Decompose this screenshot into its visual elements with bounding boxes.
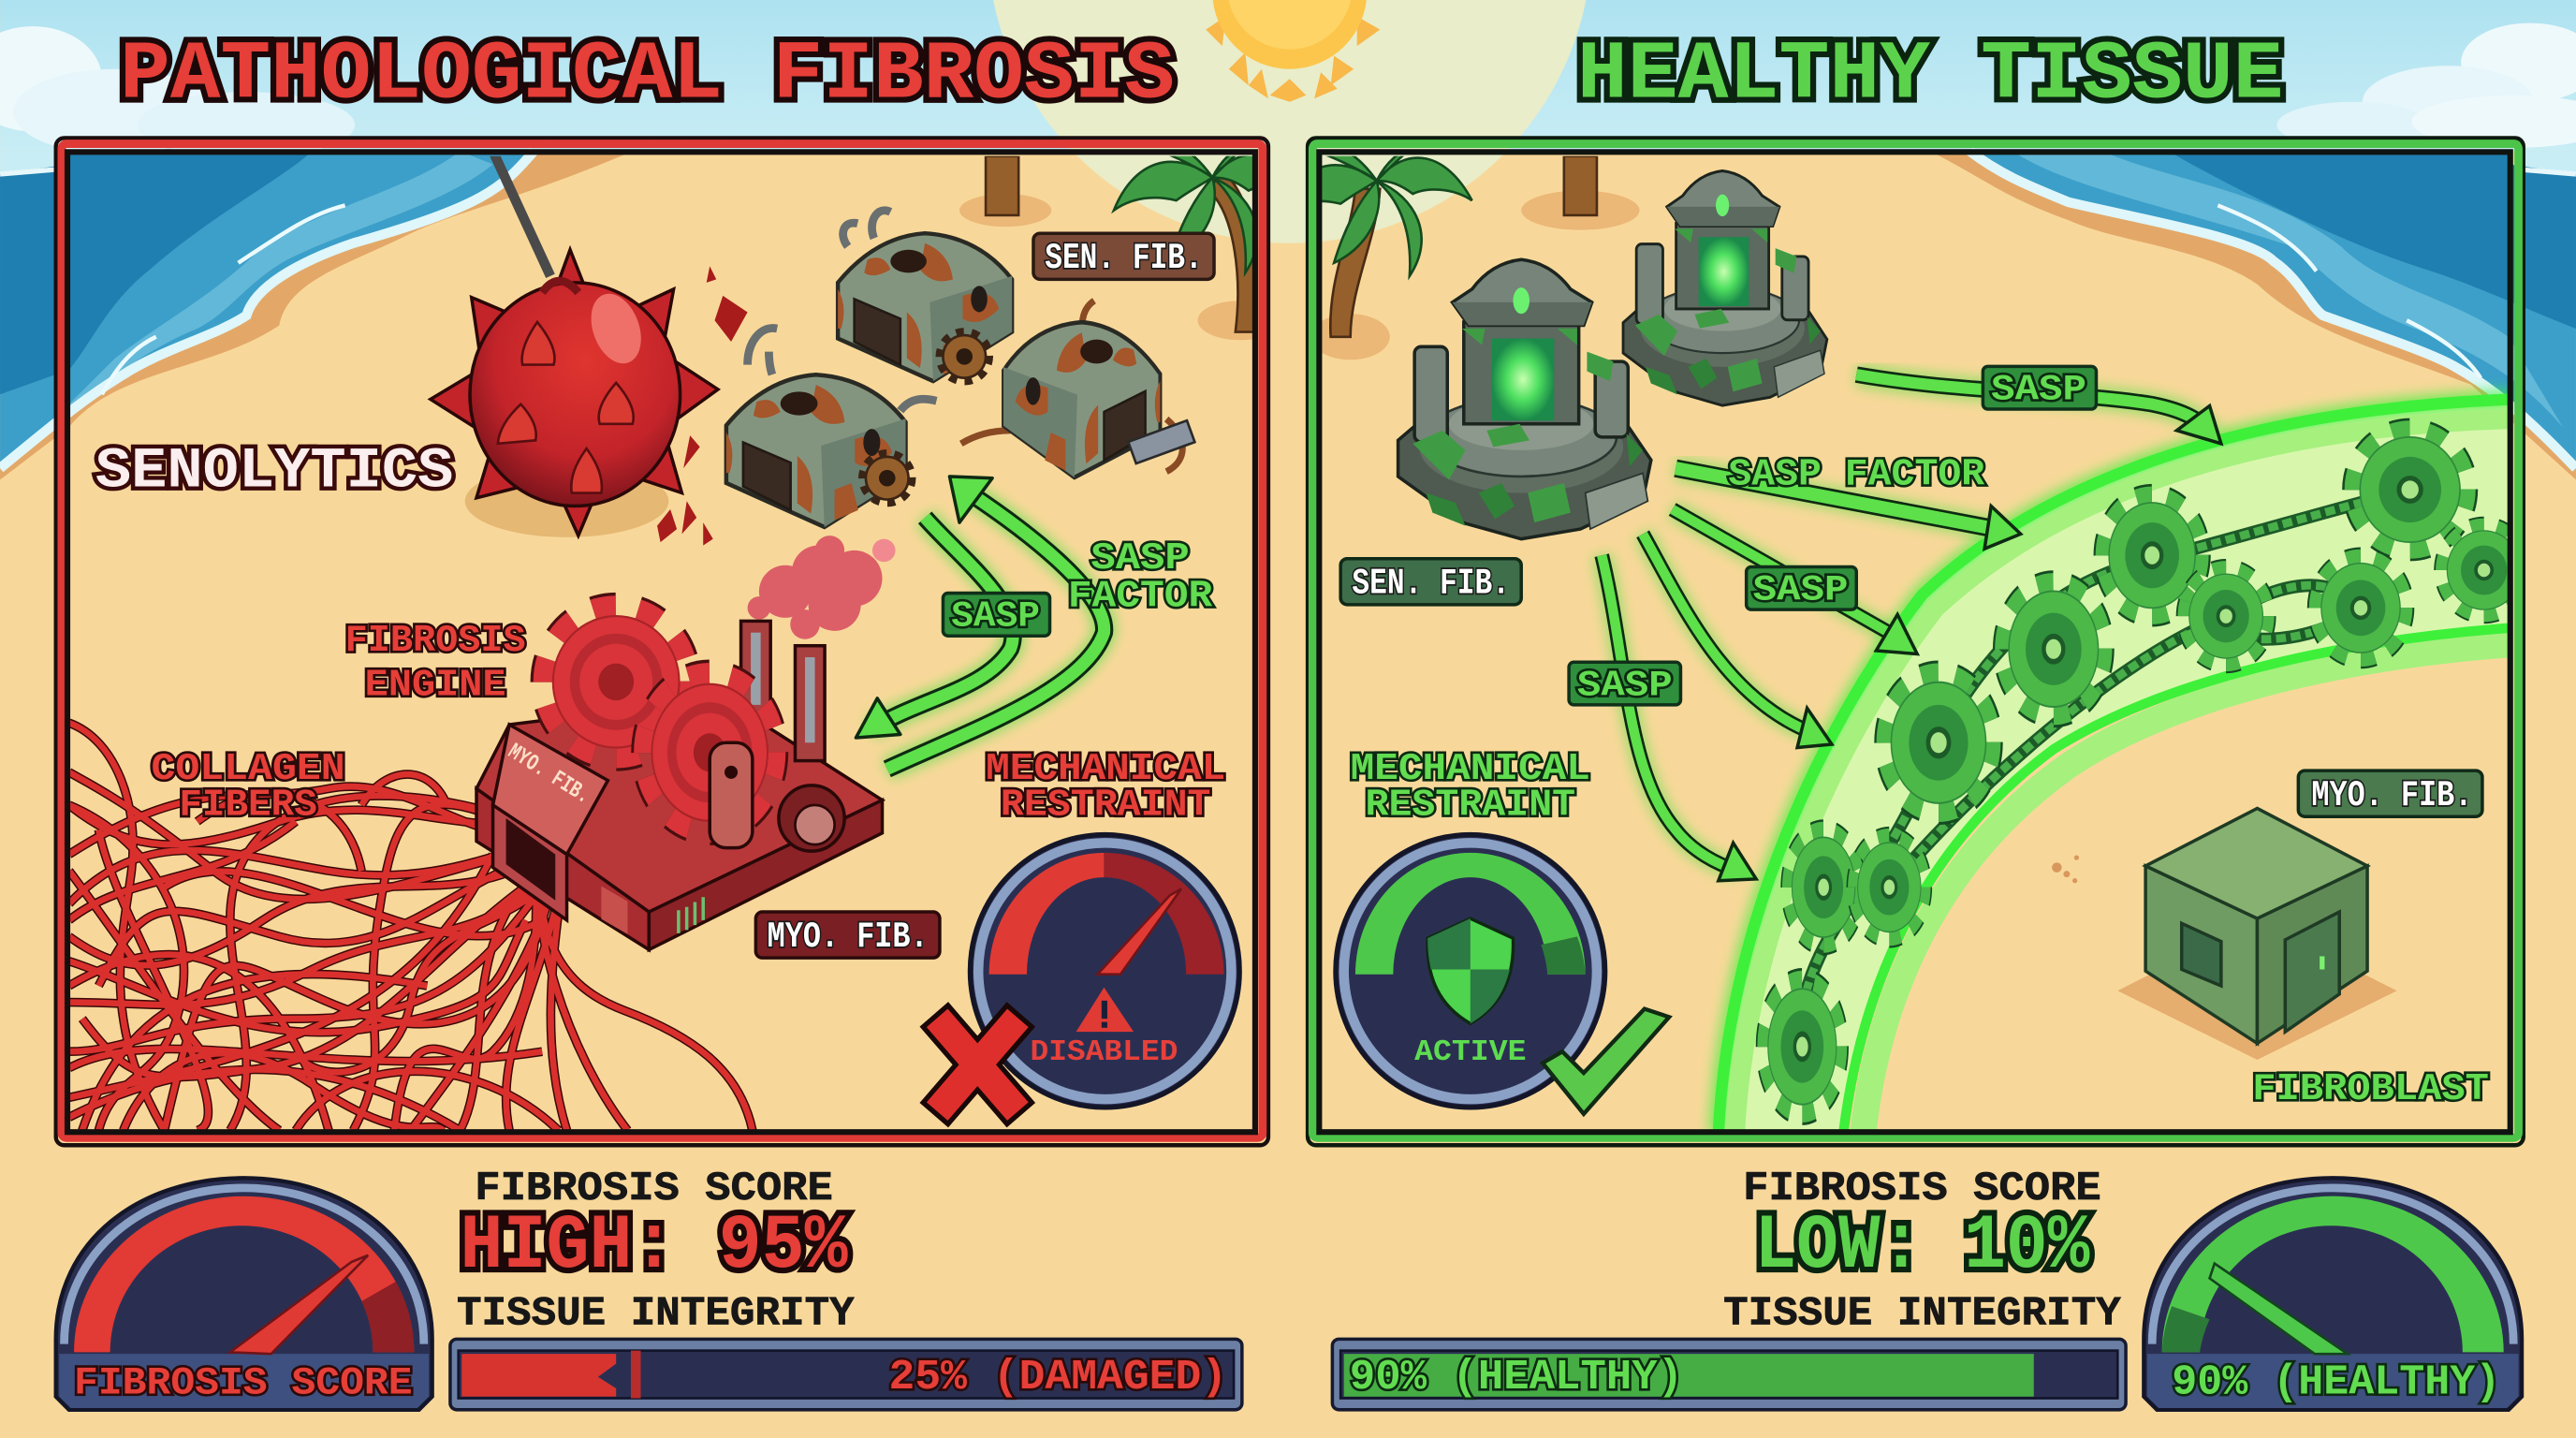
debris xyxy=(657,266,748,546)
arrow: SASP middle xyxy=(1673,509,1917,654)
label: mechanical restraint: RESTRAINT xyxy=(1365,784,1575,827)
label: collagen fibers xyxy=(150,751,345,818)
label: sasp lower: SASP xyxy=(1577,665,1673,706)
readout: right fibrosis score: FIBROSIS SCORE xyxy=(1743,1166,2101,1212)
panel frame: right xyxy=(1308,138,2524,1145)
icon: front temple xyxy=(1398,259,1651,539)
label: senolytics: SENOLYTICS xyxy=(95,439,453,504)
title: pathological fibrosis: PATHOLOGICAL FIBROSIS xyxy=(120,30,1175,123)
icon: back temple xyxy=(1623,171,1827,405)
panel frame: left xyxy=(56,138,1268,1145)
healthy restraint band xyxy=(1719,399,2513,1137)
score gauge: fibrosis (left): FIBROSIS SCORE xyxy=(74,1360,413,1405)
score gauge: health (right): 90% (HEALTHY) xyxy=(2172,1357,2500,1406)
progress bar: tissue integrity 25% xyxy=(450,1339,1242,1410)
readout: left fibrosis score: TISSUE INTEGRITY xyxy=(457,1291,855,1338)
label: fibroblast: FIBROBLAST xyxy=(2252,1068,2489,1111)
smoke xyxy=(748,536,896,639)
arrow: SASP to factory xyxy=(856,518,1013,738)
icon: red X xyxy=(946,1029,1009,1101)
score gauge: fibrosis (left) xyxy=(56,1178,432,1410)
icon: active restraint gauge: ACTIVE xyxy=(1414,1036,1526,1069)
chains xyxy=(1799,490,2410,1035)
collagen fibers xyxy=(69,723,753,1130)
label: mechanical restraint: MECHANICAL xyxy=(986,748,1225,791)
label: fibrosis engine xyxy=(345,623,527,698)
sand specks xyxy=(2052,855,2079,883)
icon: green check xyxy=(1543,1009,1669,1114)
arrow: SASP factor to ruins xyxy=(887,477,1105,769)
progress bar: tissue integrity 25%: 25% (DAMAGED) xyxy=(889,1353,1227,1401)
shield xyxy=(1427,918,1514,1023)
panel: healthy tissue scene xyxy=(1278,142,2525,1137)
label: sasp pill: SASP xyxy=(951,596,1040,638)
factory plate label: MYO. FIB. xyxy=(503,740,594,810)
label: mechanical restraint: MECHANICAL xyxy=(1351,748,1590,791)
icon: palm trees, left panel xyxy=(959,155,1252,341)
icon: palm trees, right panel xyxy=(1278,142,1640,360)
label: collagen fibers: FIBERS xyxy=(179,784,317,827)
progress bar: tissue integrity 90%: 90% (HEALTHY) xyxy=(1350,1353,1683,1401)
label: fibrosis engine: ENGINE xyxy=(365,664,506,707)
label: mechanical restraint: RESTRAINT xyxy=(1001,784,1211,827)
smokestacks xyxy=(741,621,825,761)
icon: ruined senescent fibroblast 2 xyxy=(726,329,936,527)
label: collagen fibers: COLLAGEN xyxy=(152,748,345,791)
arrow: SASP curved xyxy=(1643,534,1832,748)
label: sasp factor: SASP xyxy=(1090,537,1190,580)
label: sen. fib.: SEN. FIB. xyxy=(1352,564,1510,605)
icon: sun xyxy=(1206,0,1380,102)
readout: left fibrosis score: HIGH: 95% xyxy=(460,1202,848,1290)
label: fibrosis engine: FIBROSIS xyxy=(345,620,526,663)
label: sasp factor: FACTOR xyxy=(1068,576,1213,619)
label: myo. fib.: MYO. FIB. xyxy=(768,917,929,958)
readout: left fibrosis score xyxy=(457,1166,855,1338)
label: myo. fib.: MYO. FIB. xyxy=(2311,775,2472,816)
score gauge: health (right) xyxy=(2144,1178,2522,1410)
readout: right fibrosis score xyxy=(1723,1166,2121,1338)
label: sasp factor: SASP FACTOR xyxy=(1728,454,1985,497)
label: mechanical restraint xyxy=(1351,748,1590,827)
label: sasp top: SASP xyxy=(1991,369,2086,410)
icon: spiked wrecking ball xyxy=(431,250,718,537)
arrow: SASP factor xyxy=(1676,468,2021,549)
progress bar: tissue integrity 90% xyxy=(1332,1339,2126,1410)
icon: fibrosis engine factory xyxy=(476,536,896,949)
label: mechanical restraint xyxy=(985,751,1226,818)
readout: left fibrosis score: FIBROSIS SCORE xyxy=(475,1166,833,1212)
panel: pathological fibrosis scene xyxy=(69,139,1308,1130)
icon: ruined senescent fibroblast 3 xyxy=(961,301,1194,477)
label: sasp factor xyxy=(1069,540,1217,609)
icon: wrecking ball chain xyxy=(493,151,550,276)
left ocean and beach xyxy=(0,151,633,479)
arrow: SASP top xyxy=(1856,374,2221,444)
right ocean and beach xyxy=(1930,151,2576,479)
label: sasp middle: SASP xyxy=(1753,570,1848,611)
title: healthy tissue: HEALTHY TISSUE xyxy=(1577,30,2284,123)
icon: mechanical restraint gauge, disabled: DISABLED xyxy=(1030,1036,1178,1069)
icon: active restraint gauge xyxy=(1336,835,1605,1108)
icon: mechanical restraint gauge, disabled xyxy=(970,835,1239,1108)
icon: ruined senescent fibroblast 1 xyxy=(838,211,1012,381)
green gears xyxy=(1764,433,2525,1110)
arrow: SASP lower xyxy=(1602,555,1756,881)
readout: right fibrosis score: LOW: 10% xyxy=(1754,1202,2090,1290)
label: sen. fib.: SEN. FIB. xyxy=(1045,238,1203,279)
readout: right fibrosis score: TISSUE INTEGRITY xyxy=(1723,1291,2121,1338)
icon: fibroblast building xyxy=(2117,808,2397,1060)
